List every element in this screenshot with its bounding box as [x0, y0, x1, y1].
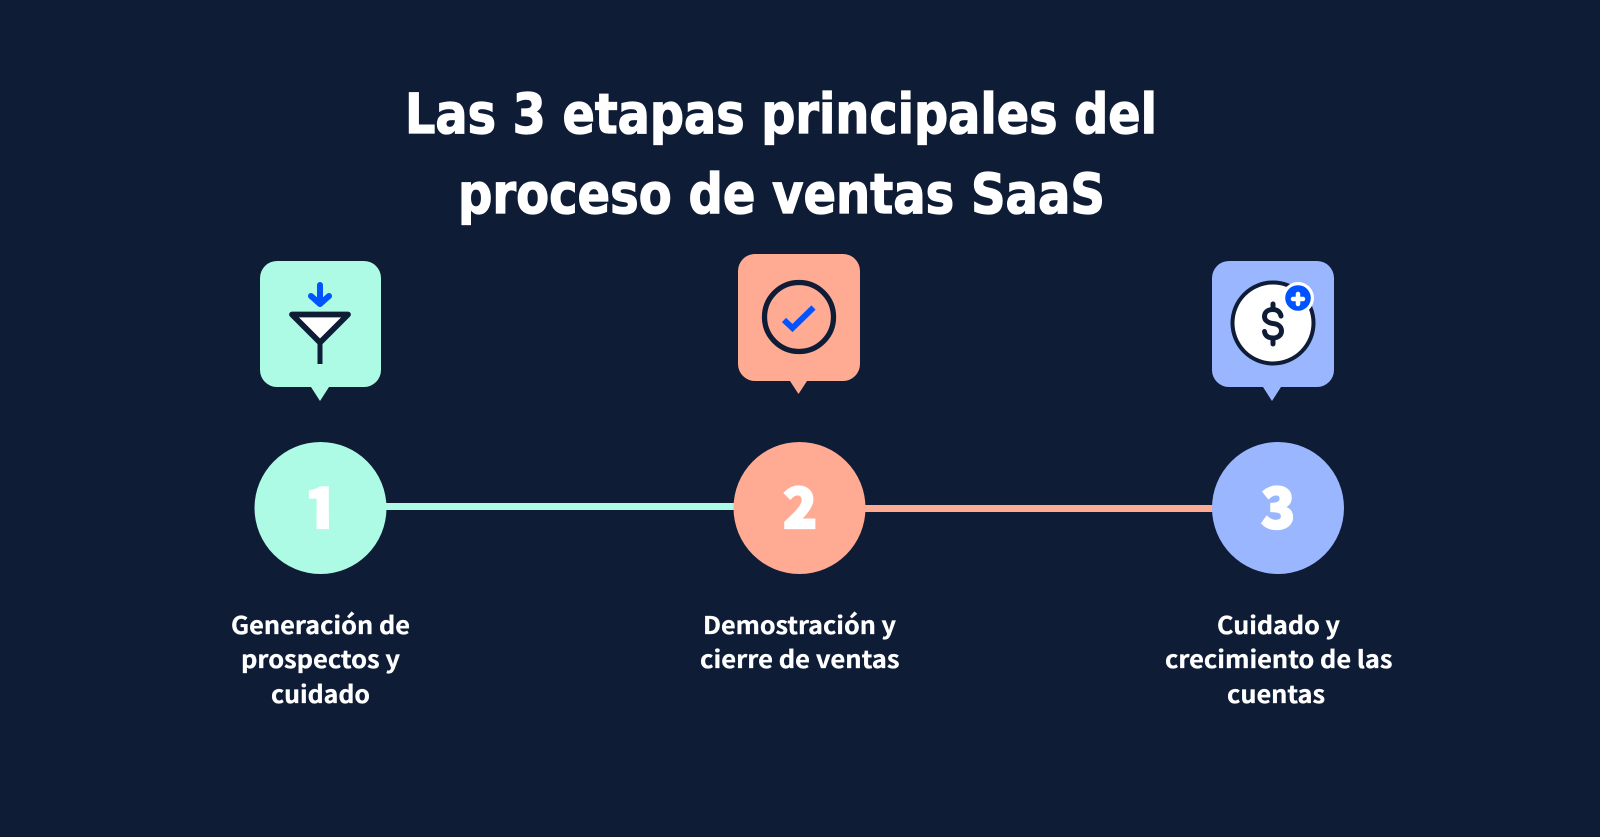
icon: dollar coin speech bubble — [1212, 261, 1334, 401]
step 2 label: Demostración y — [703, 606, 896, 641]
step 1 number circle — [254, 442, 386, 574]
connector line: step 2 to 3 — [860, 505, 1218, 512]
step 1 number circle: 1 — [304, 464, 339, 545]
step 2 label — [700, 606, 900, 675]
icon: check mark speech bubble — [738, 254, 860, 394]
step 3 number circle: 3 — [1261, 464, 1295, 545]
step 3 label: crecimiento de las — [1165, 640, 1393, 675]
title: proceso de ventas SaaS — [458, 162, 1105, 226]
step 1 label: cuidado — [271, 675, 370, 710]
step 3 number circle — [1212, 442, 1344, 574]
step 3 label: Cuidado y — [1217, 606, 1340, 641]
icon: funnel speech bubble — [260, 261, 381, 401]
step 1 label: Generación de — [231, 606, 410, 641]
step 3 label: cuentas — [1227, 675, 1325, 710]
connector line: step 1 to 2 — [380, 503, 740, 510]
title: Las 3 etapas principales del — [405, 82, 1157, 146]
step 2 label: cierre de ventas — [700, 640, 900, 675]
step 2 number circle: 2 — [783, 464, 817, 545]
step 3 label — [1165, 606, 1393, 710]
step 2 number circle — [734, 442, 866, 574]
step 1 label — [231, 606, 410, 710]
title — [405, 82, 1157, 226]
step 1 label: prospectos y — [241, 640, 400, 675]
